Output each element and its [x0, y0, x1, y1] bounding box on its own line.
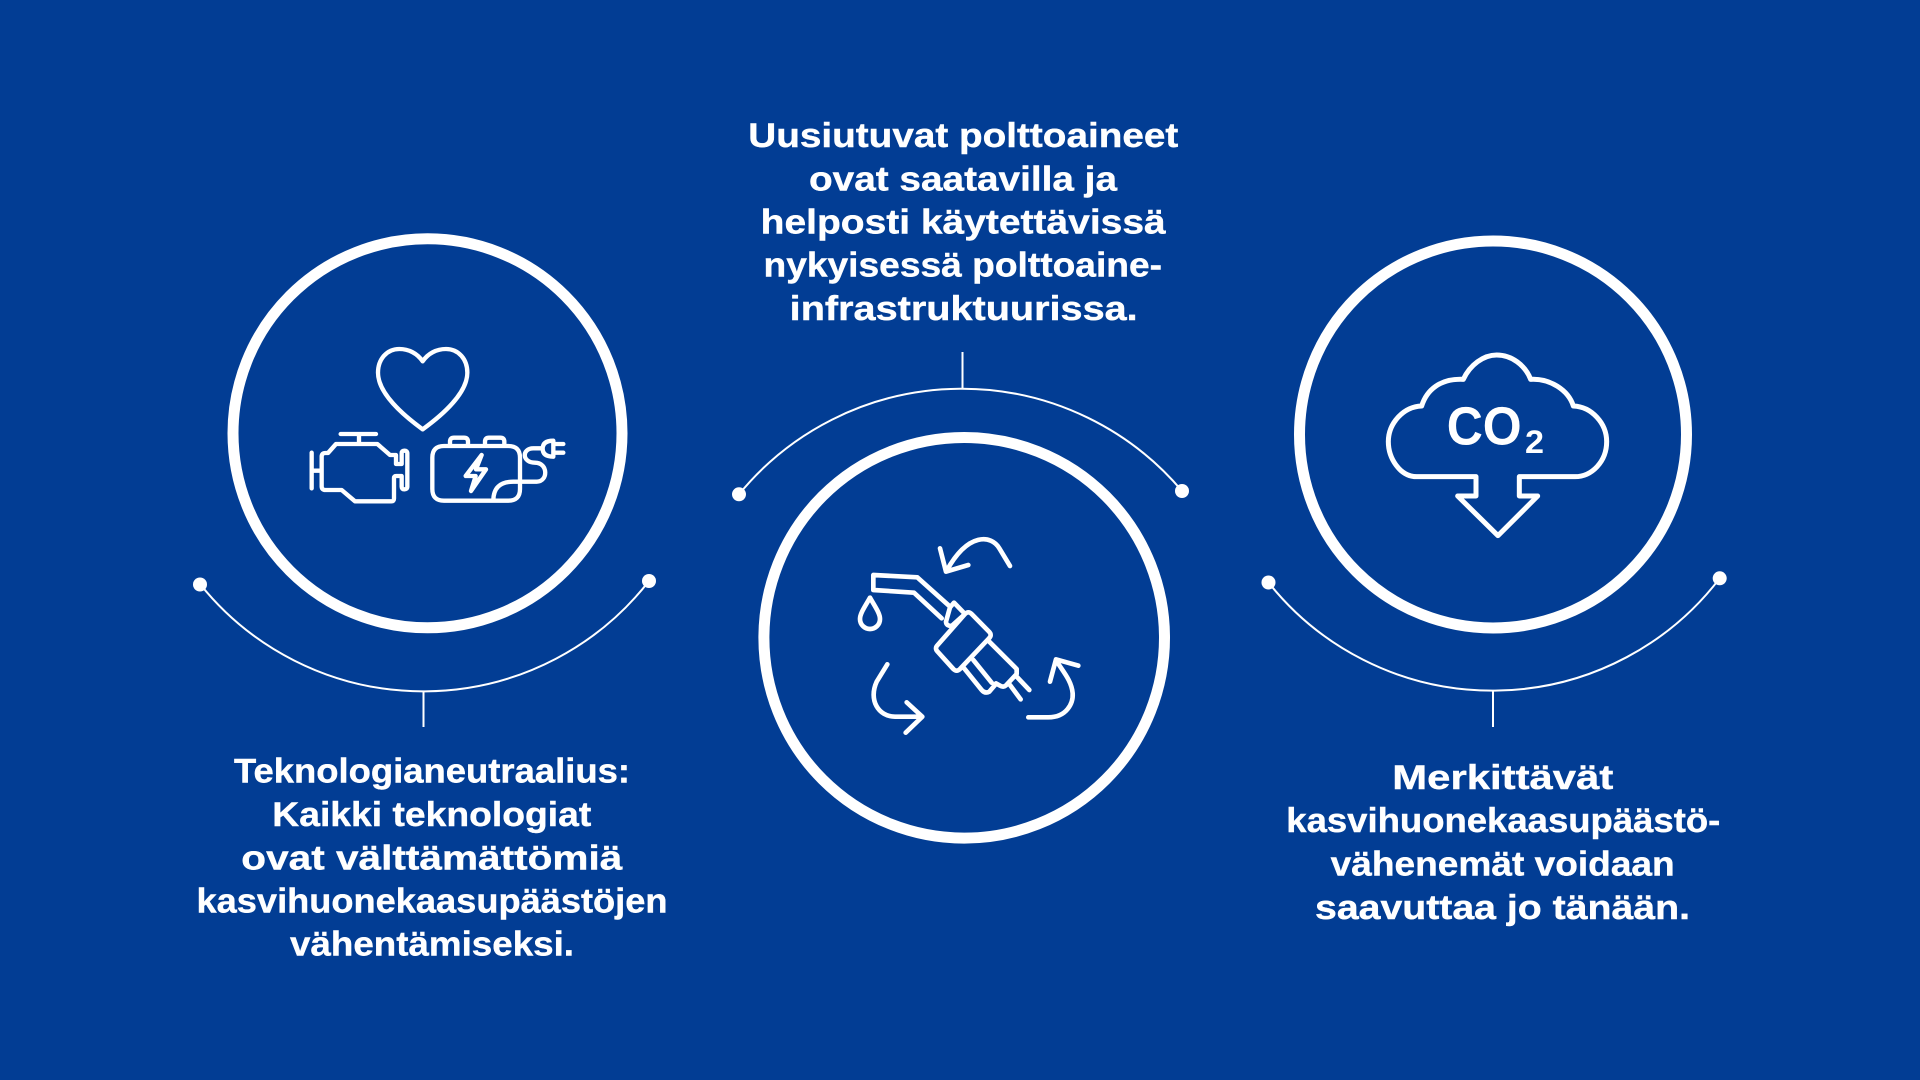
text: emission reductions: Merkittävät	[1392, 759, 1613, 797]
text: renewable fuels: ovat saatavilla ja	[809, 160, 1118, 198]
panel: renewable fuels	[732, 117, 1189, 838]
text: technology neutrality	[196, 753, 668, 964]
text: technology neutrality: kasvihuonekaasupäästöjen	[196, 882, 668, 920]
text: emission reductions: saavuttaa jo tänään.	[1315, 889, 1690, 927]
icon: cloud arrow outline	[1388, 355, 1607, 536]
arc end dot right	[1175, 484, 1189, 498]
icon: engine	[312, 434, 407, 501]
text: renewable fuels: helposti käytettävissä	[761, 204, 1166, 242]
text: emission reductions	[1286, 759, 1720, 927]
text: emission reductions: kasvihuonekaasupäästö-	[1286, 802, 1720, 840]
connector line	[962, 352, 964, 388]
arrow: right	[1028, 659, 1078, 717]
icon: fuel drop	[860, 598, 880, 629]
arrow: top	[940, 539, 1010, 572]
connector line	[1492, 691, 1494, 727]
arc end dot left	[1262, 576, 1276, 590]
connector arc	[739, 389, 1182, 494]
text: renewable fuels: nykyisessä polttoaine-	[764, 246, 1162, 284]
panel: emission reductions	[1262, 241, 1727, 927]
text: renewable fuels: Uusiutuvat polttoaineet	[748, 117, 1178, 155]
connector line	[422, 691, 424, 727]
text: technology neutrality: Teknologianeutraalius:	[234, 753, 630, 791]
ring: right circle	[1300, 241, 1686, 628]
ring: left circle	[233, 239, 622, 628]
arc end dot left	[193, 578, 207, 592]
text: technology neutrality: vähentämiseksi.	[290, 926, 574, 964]
text: renewable fuels	[748, 117, 1178, 328]
icon: battery with plug	[432, 438, 563, 501]
panel: technology neutrality	[193, 239, 668, 964]
icon: CO2 cloud with down arrow	[1388, 355, 1607, 536]
arc end dot right	[642, 574, 656, 588]
text: emission reductions: vähenemät voidaan	[1331, 846, 1675, 884]
icon: fuel nozzle	[873, 575, 1029, 699]
label: CO2: CO	[1447, 396, 1522, 456]
connector arc	[200, 581, 649, 691]
text: technology neutrality: ovat välttämättömiä	[241, 839, 622, 877]
text: technology neutrality: Kaikki teknologiat	[272, 796, 591, 834]
arc end dot right	[1713, 571, 1727, 585]
text: renewable fuels: infrastruktuurissa.	[790, 290, 1138, 328]
icon: heart, engine and battery	[312, 349, 563, 501]
label: CO2: 2	[1525, 424, 1544, 460]
icon: fuel nozzle with recycling arrows	[860, 539, 1078, 733]
arc end dot left	[732, 487, 746, 501]
icon: heart	[378, 349, 467, 429]
ring: centre circle	[764, 438, 1164, 838]
arrow: left	[874, 664, 922, 733]
connector arc	[1268, 578, 1720, 691]
